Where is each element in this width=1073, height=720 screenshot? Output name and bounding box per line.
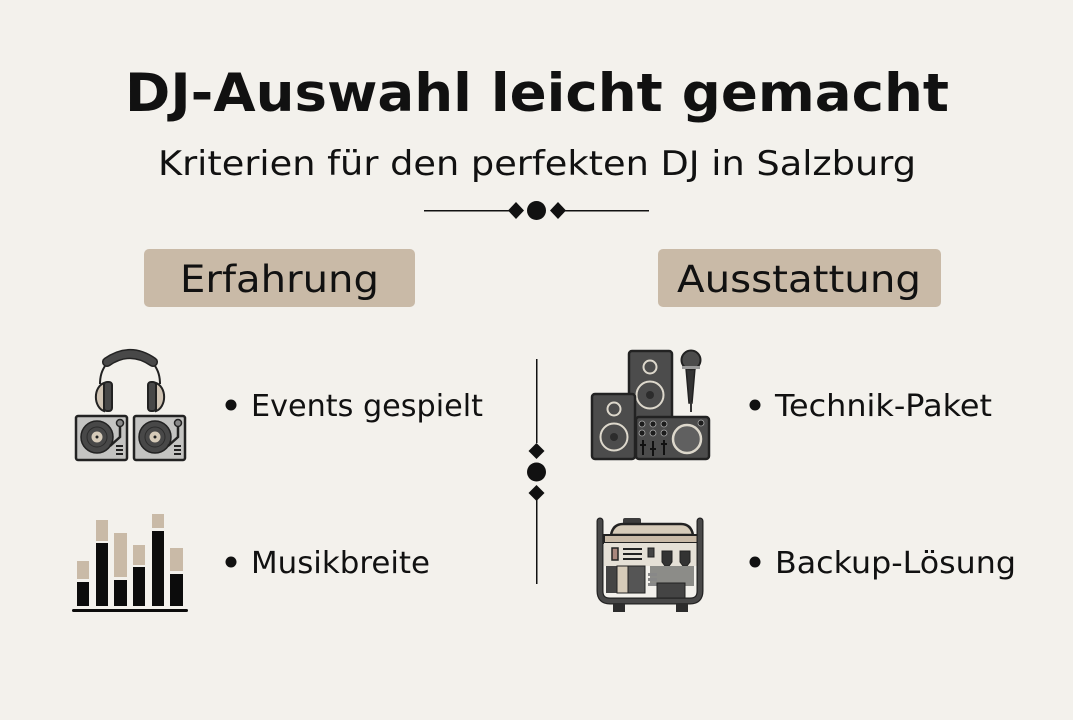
text: Backup-Lösung: Backup-Lösung [775,546,1016,581]
subtitle: Kriterien für den perfekten DJ in Salzburg [158,144,916,184]
center vertical divider [527,359,546,584]
heading: Ausstattung: Ausstattung [677,258,921,301]
text: Technik-Paket: Technik-Paket [774,389,992,424]
icon: speakers, mixer and microphone [592,350,709,459]
icon: headphones and turntables [76,354,185,460]
text: Musikbreite: Musikbreite [251,546,430,581]
ornament divider [424,201,649,220]
heading: Erfahrung [144,249,415,307]
heading: Ausstattung [658,249,941,307]
icon: power generator [600,518,700,612]
icon: equalizer bars [72,514,188,612]
heading: Erfahrung: Erfahrung [180,258,379,301]
title: DJ-Auswahl leicht gemacht [125,63,949,124]
text: Events gespielt: Events gespielt [251,389,483,424]
